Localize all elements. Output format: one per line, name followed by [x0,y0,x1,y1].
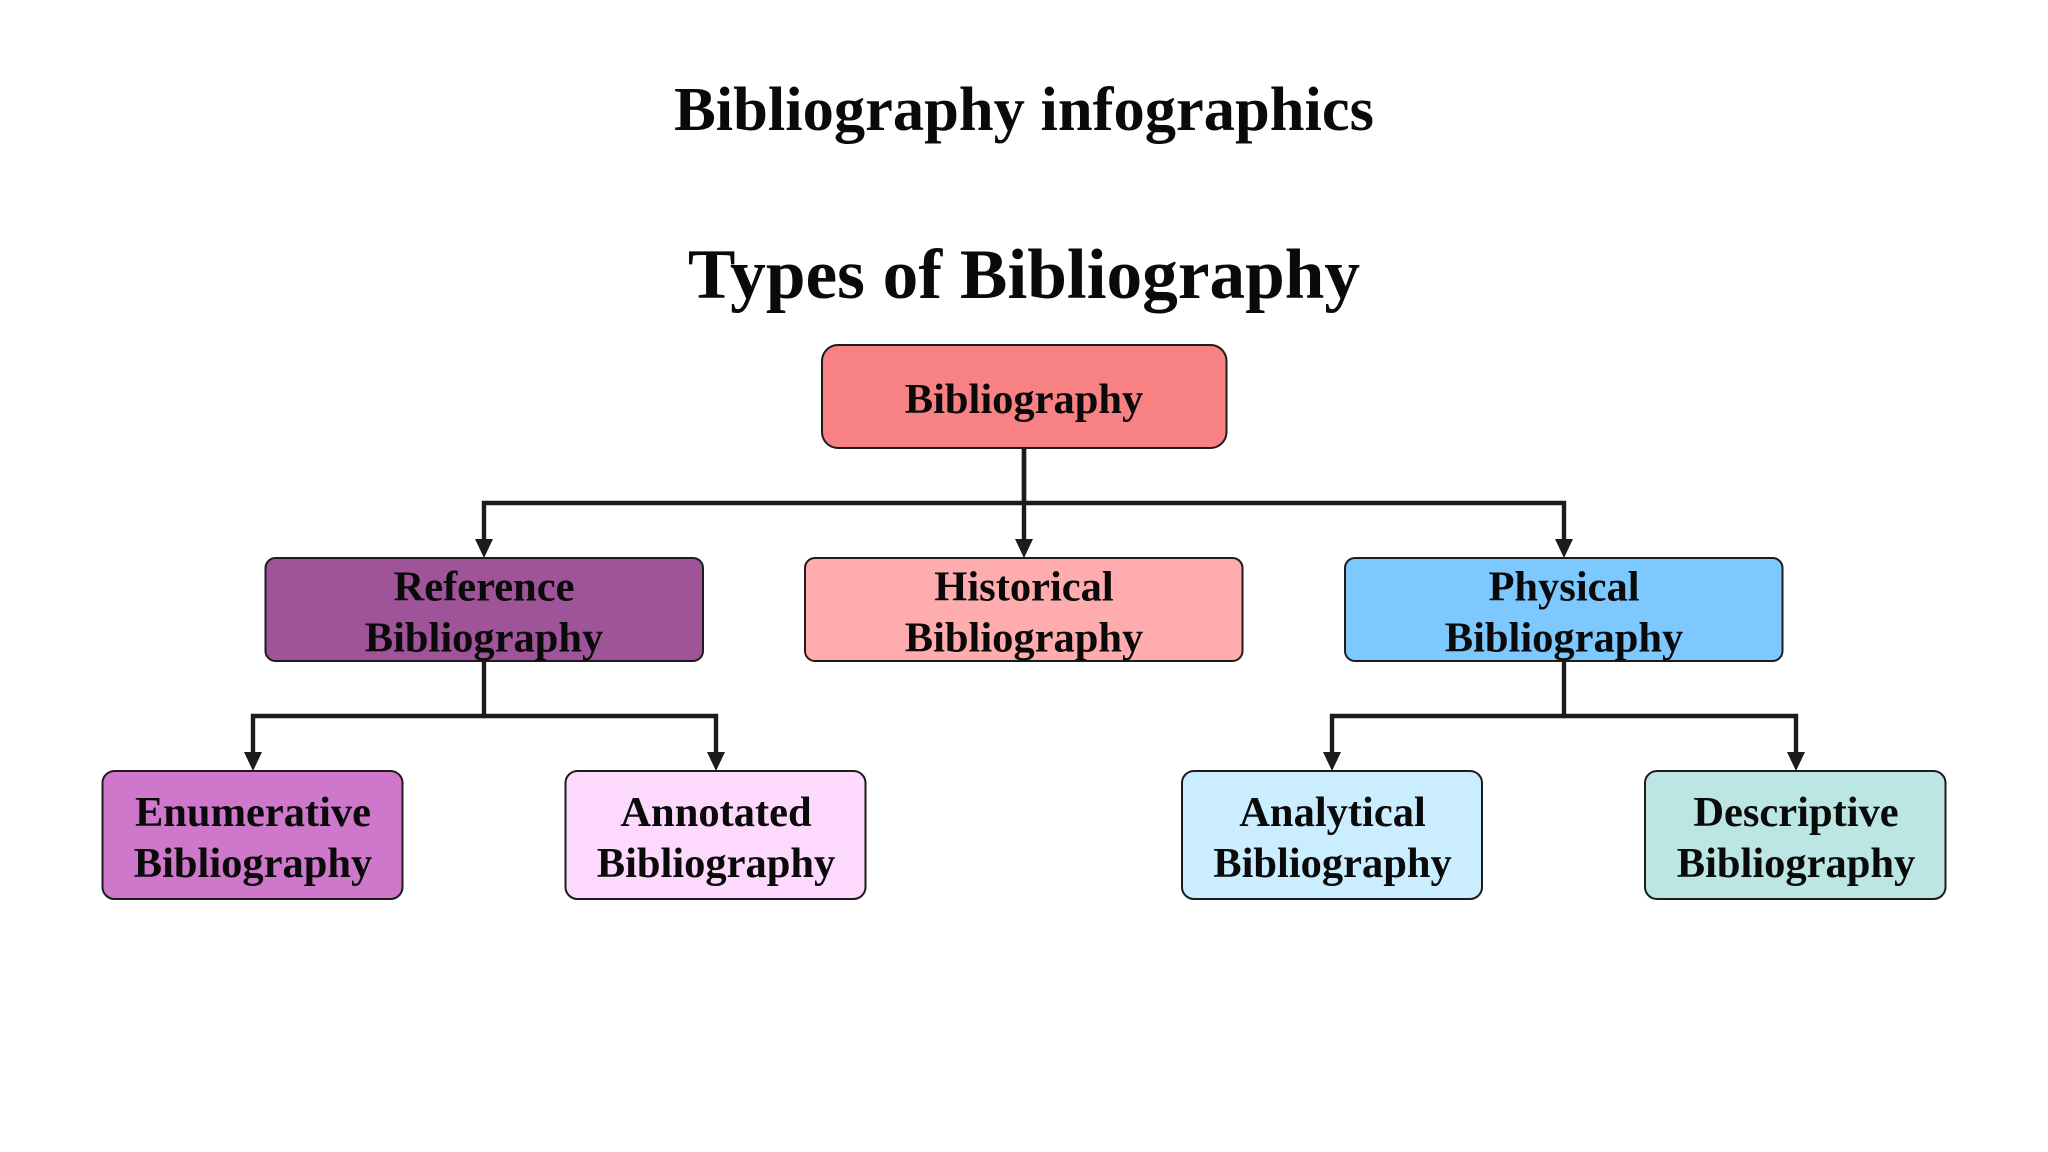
node: Analytical Bibliography [1182,771,1482,899]
node: Physical Bibliography [1345,558,1782,662]
arrow: to Analytical Bibliography [1323,661,1564,771]
node: Enumerative Bibliography: Bibliography [134,840,372,887]
node: Annotated Bibliography [566,771,866,899]
title: Bibliography infographics [674,74,1374,144]
node: Analytical Bibliography: Analytical [1239,789,1426,836]
node: Annotated Bibliography: Bibliography [597,840,835,887]
connectors: root to second level [475,448,1573,558]
arrow: to Descriptive Bibliography [1564,716,1805,771]
arrow: to Reference Bibliography [475,448,1024,558]
node: Analytical Bibliography: Bibliography [1213,840,1452,887]
node: Historical Bibliography [805,558,1242,662]
node: Historical Bibliography: Bibliography [905,614,1143,662]
arrow: to Physical Bibliography [1024,503,1573,558]
node: Physical Bibliography: Bibliography [1445,614,1683,662]
node: Bibliography [822,345,1226,448]
node: Reference Bibliography: Bibliography [365,614,603,662]
heading: types of bibliography: Types of Bibliography [688,235,1360,314]
node: Descriptive Bibliography: Bibliography [1677,840,1915,887]
node: Enumerative Bibliography: Enumerative [135,789,371,836]
node: Physical Bibliography: Physical [1488,564,1640,610]
arrow: to Enumerative Bibliography [244,661,484,771]
node: Historical Bibliography: Historical [934,564,1114,610]
node: Descriptive Bibliography [1645,771,1946,899]
node: Bibliography: Bibliography [905,376,1143,423]
connectors: Reference Bibliography children [244,661,725,771]
connectors: Physical Bibliography children [1323,661,1805,771]
arrow: to Historical Bibliography [1015,448,1033,558]
node: Reference Bibliography [266,558,703,662]
arrow: to Annotated Bibliography [484,716,725,771]
node: Descriptive Bibliography: Descriptive [1693,789,1899,836]
node: Annotated Bibliography: Annotated [620,789,812,836]
node: Reference Bibliography: Reference [394,564,574,610]
node: Enumerative Bibliography [102,771,402,899]
